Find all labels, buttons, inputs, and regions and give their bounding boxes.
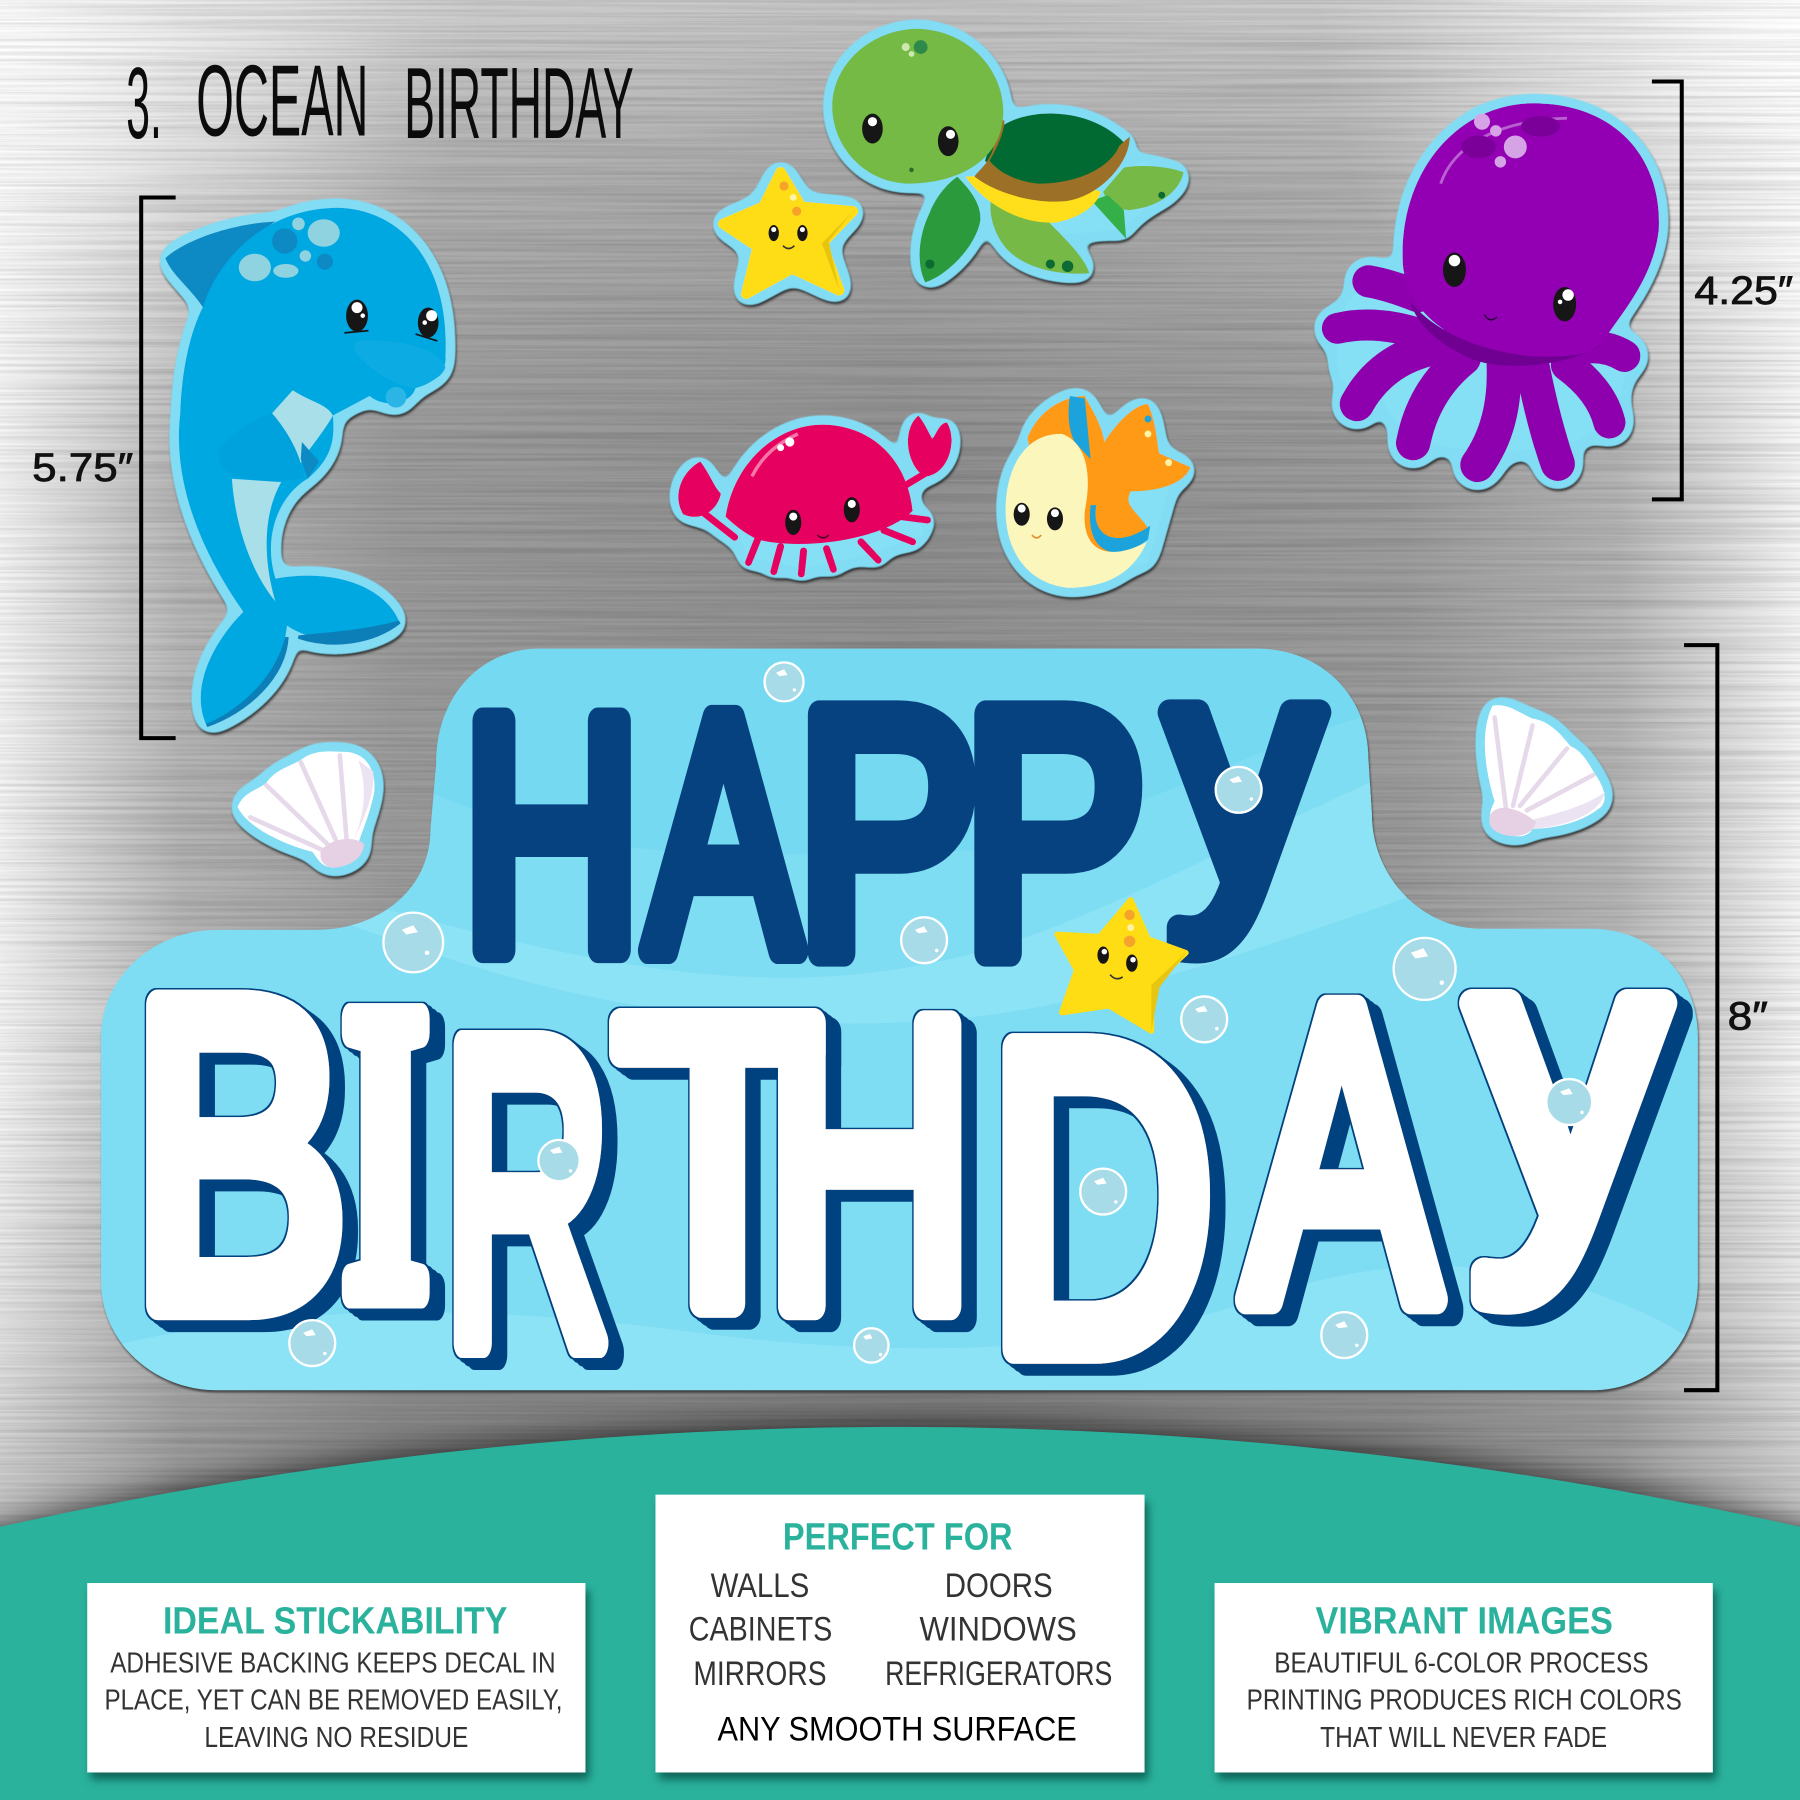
sticker: fish xyxy=(1006,396,1190,588)
word: BIRTHDAY: D xyxy=(988,955,1214,1442)
sticker: octopus xyxy=(1337,103,1659,465)
card: ideal stickability: PLACE, YET CAN BE REMOVED EASILY, xyxy=(104,1684,562,1716)
word: HAPPY: H xyxy=(462,649,641,1021)
card: vibrant images: VIBRANT IMAGES xyxy=(1316,1601,1613,1643)
card: perfect for: MIRRORS xyxy=(693,1655,827,1693)
title xyxy=(126,45,634,160)
card: ideal stickability: LEAVING NO RESIDUE xyxy=(204,1722,468,1754)
card: perfect for: ANY SMOOTH SURFACE xyxy=(717,1710,1077,1748)
dimension bracket: dolphin height xyxy=(141,197,176,738)
word: BIRTHDAY: y xyxy=(1472,850,1665,1305)
card: perfect for: DOORS xyxy=(945,1567,1053,1605)
word: HAPPY xyxy=(462,592,1320,1027)
sticker: turtle xyxy=(832,29,1184,282)
sign water bands xyxy=(101,649,1699,1395)
word: BIRTHDAY: I xyxy=(342,918,429,1385)
bubbles xyxy=(289,662,1592,1366)
word: BIRTHDAY: R xyxy=(443,951,611,1435)
sticker: dolphin xyxy=(165,208,446,726)
card: perfect for xyxy=(655,1495,1145,1772)
text: BIRTHDAY xyxy=(404,48,634,160)
card: ideal stickability xyxy=(87,1583,585,1772)
card: perfect for: PERFECT FOR xyxy=(783,1517,1013,1559)
sign starfish xyxy=(1057,900,1186,1031)
word: HAPPY: A xyxy=(647,646,801,1023)
word: BIRTHDAY: B xyxy=(131,910,348,1398)
dimension label 5.75: 5.75″ xyxy=(32,445,133,490)
card: perfect for: CABINETS xyxy=(689,1610,832,1648)
word: HAPPY: P xyxy=(963,640,1146,1027)
sticker: crab xyxy=(678,416,952,574)
title: OCEAN xyxy=(196,45,368,157)
word: BIRTHDAY: H xyxy=(764,937,975,1393)
dimension bracket: octopus height xyxy=(1652,82,1682,499)
teal footer arc xyxy=(0,1426,1800,1800)
word: HAPPY: P xyxy=(796,640,979,1027)
card: ideal stickability: IDEAL STICKABILITY xyxy=(163,1601,507,1643)
sign background shape xyxy=(101,649,1698,1390)
card: perfect for: WALLS xyxy=(711,1567,809,1605)
panel: happy birthday sign xyxy=(101,592,1699,1442)
card: perfect for: REFRIGERATORS xyxy=(885,1655,1112,1693)
word: BIRTHDAY xyxy=(131,850,1665,1442)
sticker: left seashell xyxy=(238,751,375,868)
title: 3. xyxy=(126,48,162,160)
sticker: starfish xyxy=(723,172,853,294)
dimension label 4.25: 4.25″ xyxy=(1694,268,1793,313)
card: vibrant images xyxy=(1215,1583,1713,1772)
word: BIRTHDAY: T xyxy=(613,933,822,1390)
card: perfect for: WINDOWS xyxy=(920,1610,1077,1648)
dimension label 8: 8″ xyxy=(1728,994,1768,1039)
card: vibrant images: PRINTING PRODUCES RICH COLORS xyxy=(1247,1684,1682,1716)
word: BIRTHDAY: A xyxy=(1245,918,1440,1389)
card: vibrant images: BEAUTIFUL 6-COLOR PROCESS xyxy=(1274,1648,1648,1680)
word: HAPPY: y xyxy=(1169,592,1320,954)
dimension bracket: sign height xyxy=(1684,645,1717,1390)
sticker: right seashell xyxy=(1485,705,1605,836)
card: ideal stickability: ADHESIVE BACKING KEEPS DECAL IN xyxy=(110,1648,556,1680)
card: vibrant images: THAT WILL NEVER FADE xyxy=(1320,1722,1607,1754)
